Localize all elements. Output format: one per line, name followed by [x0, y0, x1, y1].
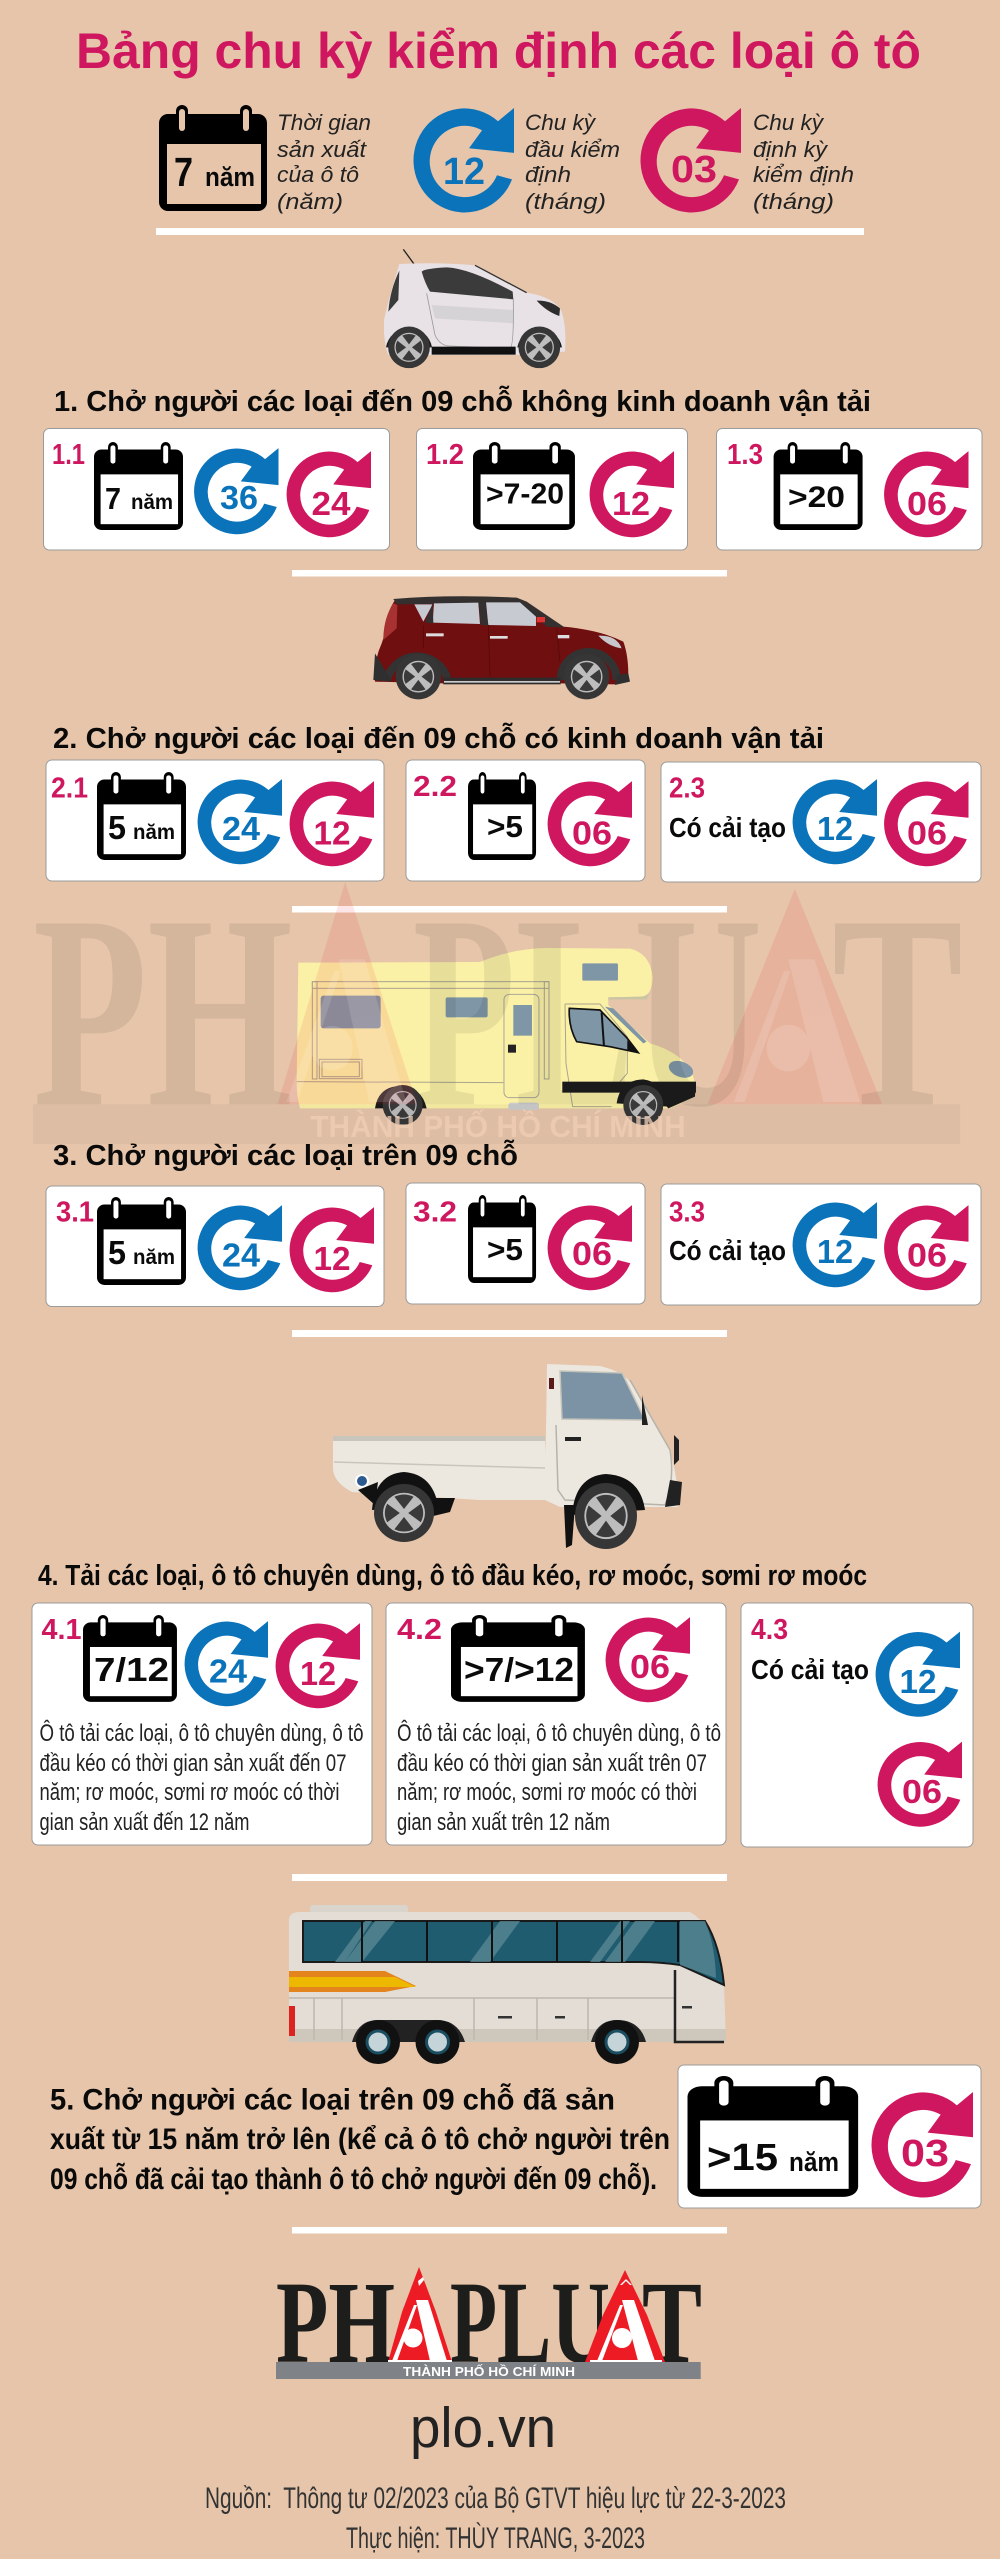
pink cycle 06	[606, 1617, 690, 1702]
legend text: manufacture time	[277, 110, 371, 214]
pink cycle 12	[290, 781, 374, 866]
calendar 3.2	[468, 1195, 536, 1283]
legend: first inspection cycle arrow	[413, 108, 514, 212]
calendar 2.2: >5	[487, 809, 523, 844]
panel 1.2	[416, 428, 688, 550]
legend: periodic inspection cycle arrow: 03	[671, 149, 717, 191]
description 4.1: đầu kéo có thời gian sản xuất đến 07	[40, 1750, 346, 1777]
heading 1: 1. Chở người các loại đến 09 chỗ không kinh doanh vận tải	[54, 384, 871, 418]
panel 3.1	[46, 1186, 384, 1306]
description 4.1: năm; rơ moóc, sơmi rơ moóc có thời	[40, 1779, 340, 1806]
legend text: periodic inspection cycle: Chu kỳ	[753, 110, 825, 135]
blue cycle 24	[198, 779, 282, 864]
panel 5	[678, 2065, 981, 2208]
pink cycle 06: 06	[572, 814, 612, 852]
legend text: first inspection cycle: định	[525, 162, 571, 187]
calendar 5: >15	[707, 2137, 778, 2179]
title: Bảng chu kỳ kiểm định các loại ô tô	[76, 23, 921, 79]
description 4.2: Ô tô tải các loại, ô tô chuyên dùng, ô tô	[397, 1719, 721, 1747]
description 4.2: năm; rơ moóc, sơmi rơ moóc có thời	[397, 1779, 697, 1806]
calendar 4.1: 7/12	[94, 1651, 169, 1688]
legend text: manufacture time: sản xuất	[277, 137, 367, 162]
icon: coach bus	[289, 1905, 726, 2064]
calendar 3.1: 5	[108, 1234, 126, 1271]
panel 1.3	[716, 428, 982, 550]
pink cycle 06: 06	[902, 1773, 942, 1810]
panel 1.3: 1.3	[727, 439, 763, 471]
legend: manufacture time calendar: 7	[174, 149, 193, 195]
legend text: periodic inspection cycle: định kỳ	[753, 137, 829, 162]
calendar 5: năm	[789, 2147, 839, 2177]
legend text: first inspection cycle: (tháng)	[525, 189, 606, 214]
icon: white small car	[384, 249, 565, 368]
legend text: periodic inspection cycle: kiểm định	[753, 162, 854, 187]
legend text: periodic inspection cycle	[753, 110, 854, 214]
pink cycle 06	[884, 1205, 968, 1290]
logo: Pháp Luật: PH	[276, 2257, 395, 2388]
calendar 1.3	[774, 442, 863, 530]
legend text: manufacture time: của ô tô	[277, 162, 359, 187]
panel 4.2: 4.2	[397, 1614, 442, 1646]
heading 5: 09 chỗ đã cải tạo thành ô tô chở người đến 09 chỗ).	[50, 2162, 657, 2196]
panel 4.1	[32, 1603, 372, 1845]
panel 4.1: 4.1	[42, 1614, 82, 1646]
panel 2.3: 2.3	[669, 772, 705, 804]
pink cycle 06	[884, 451, 968, 537]
website: plo.vn	[410, 2396, 556, 2460]
pink cycle 12	[590, 451, 674, 537]
blue cycle 12: 12	[817, 810, 853, 847]
calendar 3.1	[97, 1197, 186, 1285]
logo: Pháp Luật: P	[450, 2257, 497, 2388]
heading 3: 3. Chở người các loại trên 09 chỗ	[53, 1138, 518, 1172]
blue cycle 24	[185, 1621, 268, 1706]
calendar 2.1: năm	[133, 821, 175, 844]
panel 1.1: 1.1	[52, 439, 85, 471]
pink cycle 12	[290, 1207, 374, 1292]
blue cycle 12: 12	[900, 1663, 936, 1700]
pink cycle 24	[287, 451, 371, 537]
pink cycle 12: 12	[314, 1240, 350, 1277]
calendar 2.1	[97, 772, 186, 860]
panel 1.2: 1.2	[426, 439, 464, 471]
heading 5	[50, 2082, 670, 2196]
panel 2.2	[406, 760, 645, 881]
panel 3.1: 3.1	[56, 1197, 94, 1229]
panel 2.3	[661, 762, 981, 882]
calendar 4.1	[83, 1615, 177, 1702]
calendar 5	[688, 2076, 858, 2197]
pink cycle 12: 12	[314, 814, 350, 852]
blue cycle 24: 24	[222, 1237, 261, 1274]
calendar 1.1: năm	[131, 491, 173, 514]
pink cycle 06: 06	[630, 1648, 670, 1685]
blue cycle 24: 24	[209, 1652, 248, 1690]
logo: Pháp Luật: T	[642, 2257, 702, 2388]
panel 4.3: 4.3	[751, 1614, 788, 1646]
legend text: manufacture time: (năm)	[277, 189, 343, 214]
panel 3.2: 3.2	[413, 1197, 457, 1229]
description 4.2: đầu kéo có thời gian sản xuất trên 07	[397, 1750, 707, 1777]
description 4.1: gian sản xuất đến 12 năm	[40, 1809, 250, 1836]
pink cycle 06	[548, 781, 632, 866]
calendar 4.2: >7/>12	[464, 1651, 574, 1688]
credit line: Thực hiện: THÙY TRANG, 3-2023	[346, 2522, 645, 2555]
icon: yellow camper van	[297, 948, 696, 1125]
description 4.1	[40, 1719, 364, 1836]
calendar 2.2	[468, 772, 536, 860]
blue cycle 12	[793, 1202, 877, 1287]
pink cycle 12	[276, 1623, 360, 1708]
panel 2.1	[46, 760, 384, 881]
panel 3.3: 3.3	[669, 1197, 705, 1229]
calendar 3.1: năm	[133, 1246, 175, 1269]
pink cycle 06	[878, 1742, 962, 1827]
calendar 2.1: 5	[108, 809, 126, 846]
pink cycle 06: 06	[572, 1235, 612, 1272]
legend: first inspection cycle arrow: 12	[443, 151, 485, 193]
calendar 1.1	[94, 442, 183, 530]
legend: manufacture time calendar	[159, 105, 267, 211]
watermark: Pháp Luật logo: P	[413, 858, 515, 1164]
panel 2.1: 2.1	[51, 772, 88, 804]
watermark: Pháp Luật logo	[33, 858, 963, 1164]
panel 4.3	[741, 1603, 973, 1847]
legend text: first inspection cycle: đầu kiểm	[525, 137, 620, 162]
watermark: Pháp Luật logo: LU	[515, 858, 762, 1164]
panel 3.3: Có cải tạo	[669, 1235, 786, 1266]
panel 3.2	[406, 1183, 645, 1304]
panel 1.1	[44, 428, 390, 550]
heading 2: 2. Chở người các loại đến 09 chỗ có kinh doanh vận tải	[53, 721, 824, 755]
legend	[159, 105, 854, 214]
calendar 3.2: >5	[487, 1232, 523, 1267]
logo: Pháp Luật: THÀNH PHỐ HỒ CHÍ MINH	[403, 2364, 575, 2379]
panel 2.2: 2.2	[413, 771, 457, 803]
calendar 1.2: >7-20	[486, 478, 564, 510]
calendar 1.1: 7	[105, 481, 121, 516]
pink cycle 12: 12	[300, 1655, 336, 1692]
pink cycle 12: 12	[612, 485, 650, 522]
heading 5: xuất từ 15 năm trở lên (kể cả ô tô chở người trên	[50, 2123, 670, 2156]
panel 2.3: Có cải tạo	[669, 812, 786, 843]
legend text: periodic inspection cycle: (tháng)	[753, 189, 834, 214]
pink cycle 06: 06	[907, 485, 947, 522]
legend text: first inspection cycle: Chu kỳ	[525, 110, 597, 135]
pink cycle 06: 06	[907, 1237, 947, 1274]
pink cycle 06: 06	[907, 814, 947, 852]
pink cycle 24: 24	[312, 485, 351, 522]
watermark: Pháp Luật logo: T	[832, 858, 963, 1164]
calendar 1.3: >20	[788, 481, 845, 514]
logo: Pháp Luật	[276, 2257, 702, 2388]
pink cycle 03: 03	[901, 2133, 949, 2175]
icon: red SUV	[373, 596, 630, 699]
blue cycle 36	[194, 448, 278, 534]
panel 3.3	[661, 1184, 981, 1305]
legend: manufacture time calendar: năm	[205, 162, 255, 192]
heading 5: 5. Chở người các loại trên 09 chỗ đã sản	[50, 2082, 615, 2116]
blue cycle 12	[793, 779, 877, 864]
calendar 1.2	[473, 442, 575, 530]
pink cycle 03	[871, 2092, 973, 2197]
watermark: Pháp Luật logo: PH	[33, 858, 293, 1164]
description 4.2: gian sản xuất trên 12 năm	[397, 1809, 610, 1836]
logo: Pháp Luật: LU	[497, 2257, 610, 2388]
blue cycle 24	[198, 1205, 282, 1290]
blue cycle 36: 36	[220, 479, 258, 516]
heading 4: 4. Tải các loại, ô tô chuyên dùng, ô tô đầu kéo, rơ moóc, sơmi rơ moóc	[38, 1560, 867, 1592]
legend text: first inspection cycle	[525, 110, 620, 214]
legend text: manufacture time: Thời gian	[277, 110, 371, 135]
pink cycle 06	[548, 1205, 632, 1290]
legend: periodic inspection cycle arrow	[640, 108, 741, 212]
blue cycle 12	[876, 1632, 960, 1717]
panel 4.3: Có cải tạo	[751, 1654, 869, 1685]
pink cycle 06	[884, 781, 968, 866]
watermark: Pháp Luật logo: THÀNH PHỐ HỒ CHÍ MINH	[310, 1109, 686, 1144]
blue cycle 12: 12	[817, 1233, 853, 1270]
calendar 4.2	[451, 1615, 585, 1702]
description 4.1: Ô tô tải các loại, ô tô chuyên dùng, ô tô	[40, 1719, 364, 1747]
panel 4.2	[386, 1603, 726, 1845]
blue cycle 24: 24	[222, 810, 261, 847]
description 4.2	[397, 1719, 721, 1836]
icon: white pickup truck	[333, 1364, 682, 1549]
